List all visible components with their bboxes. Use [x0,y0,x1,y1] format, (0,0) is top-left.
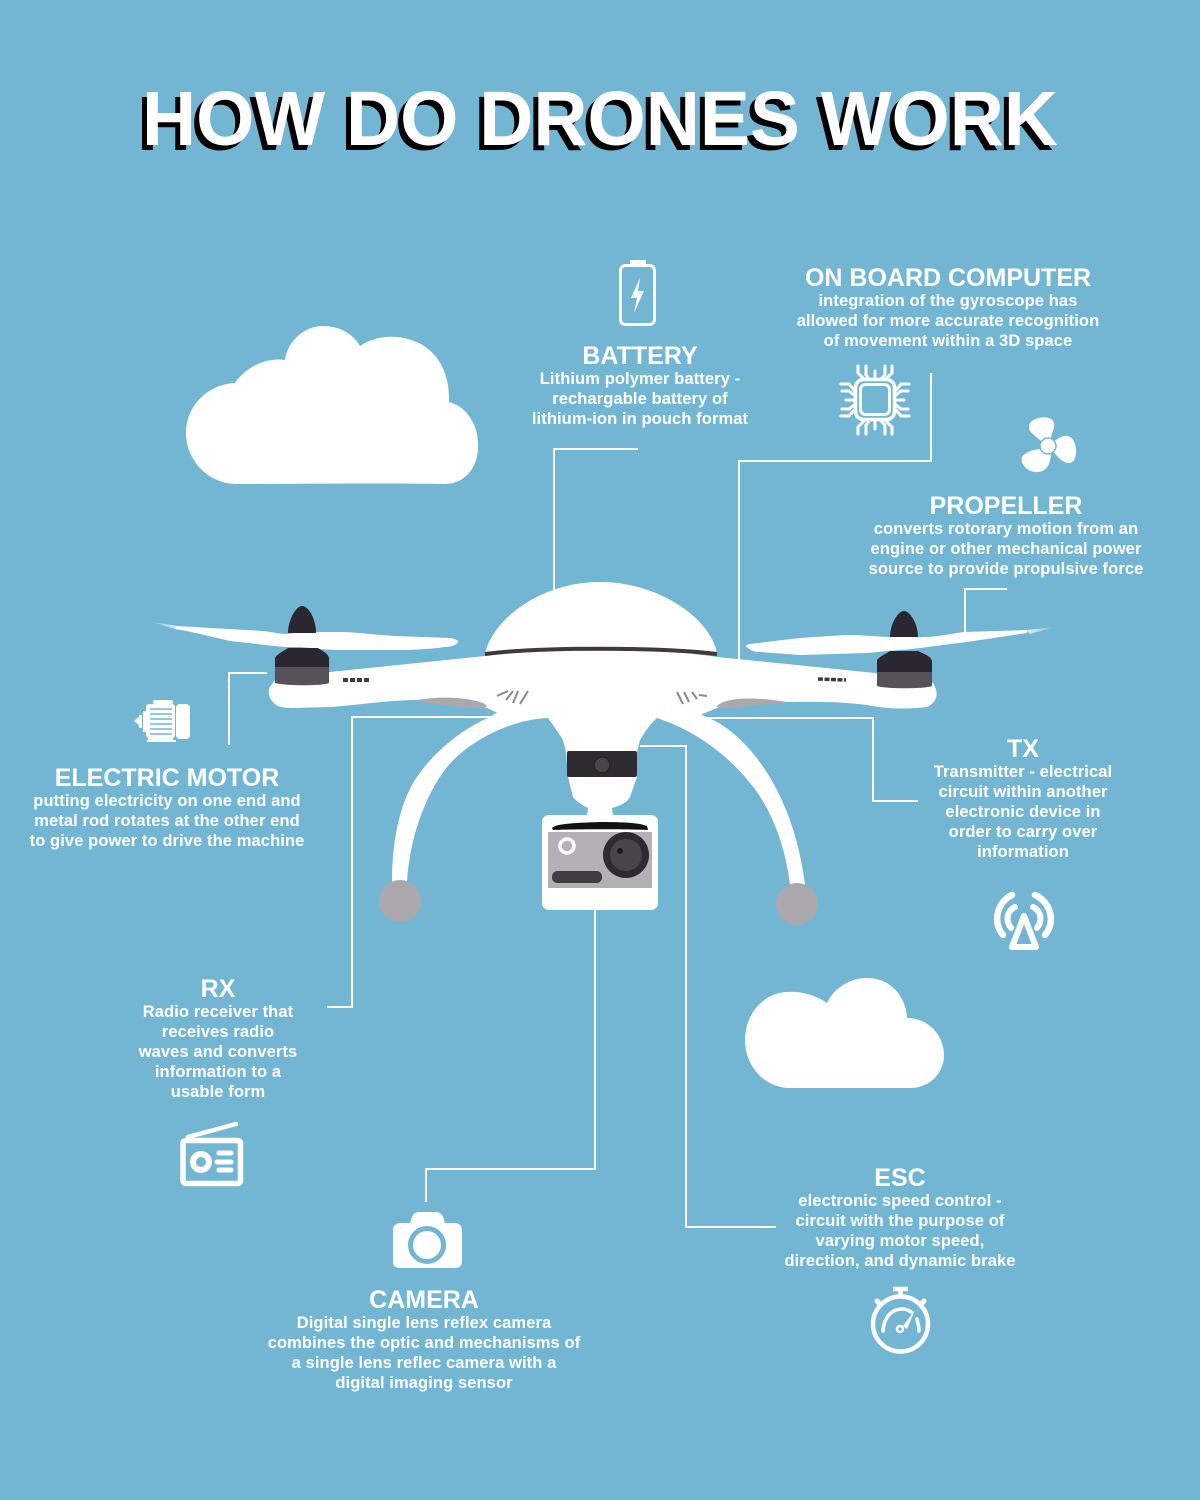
panel: electric motor [30,764,304,850]
panel: on board computer: allowed for more accurate recognition [797,312,1099,330]
leader line: tx [705,718,918,801]
panel: camera: digital imaging sensor [335,1374,513,1392]
panel: electric motor: to give power to drive the machine [30,832,304,850]
title: HOW DO DRONES WORK [142,76,1058,162]
panel: battery: lithium-ion in pouch format [532,410,749,428]
body and arms [269,650,937,815]
panel: electric motor: metal rod rotates at the other end [34,812,300,830]
panel: battery: Lithium polymer battery - [540,370,740,388]
panel: battery: rechargable battery of [552,390,728,408]
panel: tx: information [977,843,1069,861]
panel: on board computer: ON BOARD COMPUTER [805,264,1091,292]
cloud: lower right [745,978,944,1088]
icon: chip [841,366,909,434]
leader line: rx [327,717,490,1007]
panel: tx: TX [1007,735,1039,763]
icon: stopwatch [873,1289,928,1352]
panel: rx: receives radio [162,1023,274,1041]
panel: electric motor: putting electricity on one end and [33,792,301,810]
panel: esc: ESC [874,1164,926,1192]
right propeller [746,611,1054,655]
panel: rx: Radio receiver that [143,1003,294,1021]
right skid [657,712,818,925]
panel: esc: circuit with the purpose of [796,1212,1005,1230]
panel: tx [934,735,1112,861]
panel: camera: CAMERA [369,1286,479,1314]
panel: tx: order to carry over [949,823,1098,841]
panel: on board computer [797,264,1099,350]
panel: battery: BATTERY [582,342,698,370]
panel: battery [532,342,749,428]
panel: camera: a single lens reflec camera with a [292,1354,557,1372]
icon: propeller [1022,417,1076,472]
panel: tx: electronic device in [945,803,1101,821]
panel: propeller: source to provide propulsive force [869,560,1143,578]
dome band [485,649,717,654]
dome [485,582,717,654]
icon: camera [393,1212,462,1268]
panel: tx: Transmitter - electrical [934,763,1112,781]
leader line: propeller [965,589,1007,632]
leader line: esc [640,746,776,1227]
panel: esc: direction, and dynamic brake [784,1252,1016,1270]
panel: camera: combines the optic and mechanisms of [268,1334,581,1352]
panel: propeller: PROPELLER [930,492,1082,520]
leader line: on board computer [739,373,931,660]
panel: esc: varying motor speed, [816,1232,984,1250]
panel: propeller [869,492,1143,578]
camera [542,815,658,910]
icon: electric motor [134,700,190,742]
panel: camera [268,1286,581,1392]
leader line: camera [426,910,595,1202]
panel: rx: usable form [171,1083,265,1101]
icon: radio [183,1124,240,1184]
panel: electric motor: ELECTRIC MOTOR [55,764,279,792]
panel: on board computer: of movement within a 3D space [824,332,1072,350]
panel: camera: Digital single lens reflex camera [297,1314,552,1332]
title: HOW DO DRONES WORK [137,81,1053,167]
left motor [275,648,329,685]
panel: rx: waves and converts [138,1043,297,1061]
panel: rx: information to a [155,1063,282,1081]
cloud: upper left [186,326,478,484]
panel: rx: RX [201,975,236,1003]
panel: esc [784,1164,1016,1270]
left skid [379,712,552,922]
panel: propeller: converts rotorary motion from an [874,520,1138,538]
right motor [877,651,932,688]
panel: propeller: engine or other mechanical power [871,540,1142,558]
leader line: battery [554,449,638,592]
panel: tx: circuit within another [938,783,1108,801]
panel: esc: electronic speed control - [798,1192,1002,1210]
leader line: electric motor [229,673,267,745]
icon: battery [620,262,654,324]
left propeller [152,606,458,650]
drone [152,582,1054,925]
gimbal clamp [567,751,637,777]
panel: rx [138,975,297,1101]
icon: antenna [997,895,1051,947]
panel: on board computer: integration of the gyroscope has [819,292,1077,310]
body details [343,679,846,708]
